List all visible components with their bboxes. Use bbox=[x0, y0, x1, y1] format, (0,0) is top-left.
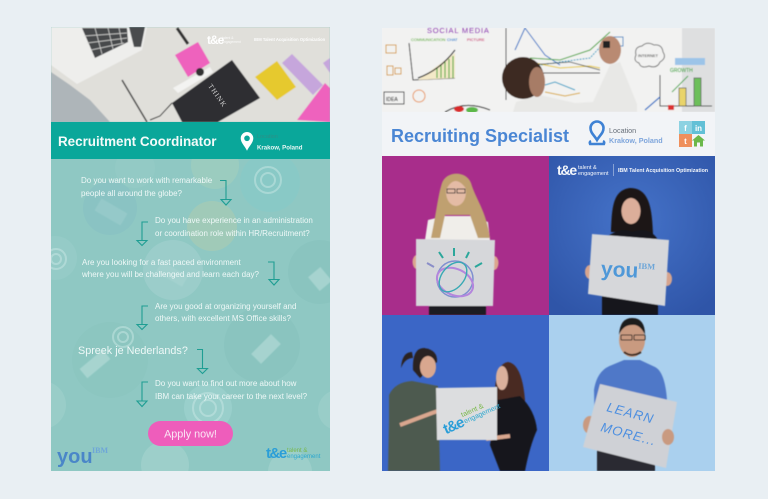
sign text: talent and engagement bbox=[442, 404, 500, 434]
job title: Recruitment Coordinator bbox=[58, 134, 217, 149]
header logo: talent & bbox=[222, 36, 234, 40]
question 3: where you will be challenged and learn each day? bbox=[81, 270, 260, 279]
sign text: talent and engagement: talent & bbox=[460, 403, 485, 419]
photo: woman with you IBM sign bbox=[549, 156, 715, 315]
whiteboard labels: PICTURE bbox=[467, 37, 485, 42]
header logo: t&e bbox=[207, 33, 225, 47]
arrows bbox=[137, 180, 279, 406]
logo: you IBM: IBM bbox=[92, 446, 108, 455]
arrow 4 bbox=[137, 306, 148, 330]
header logo bbox=[207, 33, 326, 47]
question list bbox=[78, 176, 313, 401]
icon: location pin bbox=[241, 132, 253, 151]
logo: talent and engagement bbox=[266, 445, 321, 462]
question 6: IBM can take your career to the next level? bbox=[155, 392, 308, 401]
logo: talent and engagement: talent & bbox=[287, 448, 307, 454]
logo: talent and engagement header bbox=[557, 164, 708, 176]
question 5: Spreek je Nederlands? bbox=[78, 345, 188, 357]
question 6: Do you want to find out more about how bbox=[155, 379, 297, 388]
question 6 bbox=[155, 379, 308, 401]
question 4: others, with excellent MS Office skills? bbox=[155, 314, 291, 323]
social icons: f bbox=[684, 124, 687, 133]
logo: talent and engagement: t&e bbox=[266, 445, 287, 462]
button: apply now bbox=[148, 421, 233, 446]
social icons: t bbox=[684, 137, 687, 146]
location value: Krakow, Poland bbox=[609, 136, 663, 145]
title band bbox=[382, 112, 715, 156]
sign text: talent and engagement: engagement bbox=[463, 403, 502, 425]
question 1 bbox=[81, 176, 213, 198]
arrow 5 bbox=[197, 350, 208, 374]
notebook label: THINK bbox=[206, 83, 228, 109]
sign text: you IBM bbox=[601, 263, 655, 280]
whiteboard labels bbox=[386, 26, 693, 103]
whiteboard labels: CHAT bbox=[447, 37, 458, 42]
question 2: Do you have experience in an administration bbox=[155, 216, 313, 225]
question 2: or coordination role within HR/Recruitment? bbox=[155, 229, 310, 238]
arrow 1 bbox=[220, 180, 231, 205]
panel: recruitment coordinator poster bbox=[51, 27, 330, 471]
sign text: you IBM: IBM bbox=[638, 261, 655, 272]
photo: man with learn more sign bbox=[549, 315, 715, 471]
question 2 bbox=[155, 216, 313, 238]
whiteboard labels: INTERNET bbox=[638, 53, 659, 58]
question 3: Are you looking for a fast paced environment bbox=[82, 258, 242, 267]
logo: talent and engagement header: talent & bbox=[578, 165, 597, 171]
arrow 3 bbox=[268, 262, 279, 285]
arrow 6 bbox=[137, 382, 148, 406]
location label: Location bbox=[257, 134, 278, 140]
logo: talent and engagement header: IBM Talent Acquisition Optimization bbox=[618, 168, 708, 174]
logo: you IBM bbox=[57, 446, 108, 468]
location label: Location bbox=[609, 126, 636, 135]
panel: recruiting specialist poster bbox=[382, 26, 715, 471]
decorative background badges bbox=[51, 159, 330, 471]
button: apply now: Apply now! bbox=[164, 428, 217, 440]
header logo: engagement bbox=[222, 40, 241, 44]
man at whiteboard bbox=[513, 62, 637, 112]
header logo: IBM Talent Acquisition Optimization bbox=[254, 37, 326, 42]
whiteboard labels: COMMUNICATION bbox=[411, 37, 445, 42]
whiteboard labels: SOCIAL MEDIA bbox=[427, 26, 490, 35]
sign text: talent and engagement: t&e bbox=[441, 414, 467, 438]
photo: woman with IBM logo sign bbox=[382, 156, 549, 315]
social icons bbox=[679, 121, 705, 147]
question 1: Do you want to work with remarkable bbox=[81, 176, 213, 185]
question 3 bbox=[81, 258, 260, 279]
question 1: people all around the globe? bbox=[81, 189, 183, 198]
whiteboard labels: IDEA bbox=[386, 97, 398, 103]
question 4 bbox=[155, 302, 296, 323]
question 4: Are you good at organizing yourself and bbox=[155, 302, 296, 311]
whiteboard labels: GROWTH bbox=[670, 68, 693, 74]
job title: Recruiting Specialist bbox=[391, 126, 569, 146]
arrow 2 bbox=[137, 222, 148, 246]
sign text: learn more: LEARN bbox=[605, 399, 656, 426]
photo: two women with talent and engagement sign bbox=[382, 315, 549, 471]
logo: talent and engagement header: engagement bbox=[578, 171, 609, 177]
sign text: you IBM: you bbox=[600, 258, 639, 283]
sign text: learn more bbox=[600, 402, 654, 445]
social icons: in bbox=[695, 124, 702, 133]
title band bbox=[51, 122, 330, 159]
logo: talent and engagement: engagement bbox=[287, 454, 321, 460]
sign text: learn more: MORE... bbox=[599, 419, 658, 449]
desk photo bbox=[51, 27, 330, 122]
logo: you IBM: you bbox=[57, 446, 93, 468]
location value: Krakow, Poland bbox=[257, 144, 303, 152]
logo: talent and engagement header: t&e bbox=[557, 162, 577, 178]
whiteboard photo bbox=[382, 28, 715, 113]
icon: location pin bbox=[590, 122, 604, 144]
IBM watson logo bbox=[427, 248, 482, 302]
